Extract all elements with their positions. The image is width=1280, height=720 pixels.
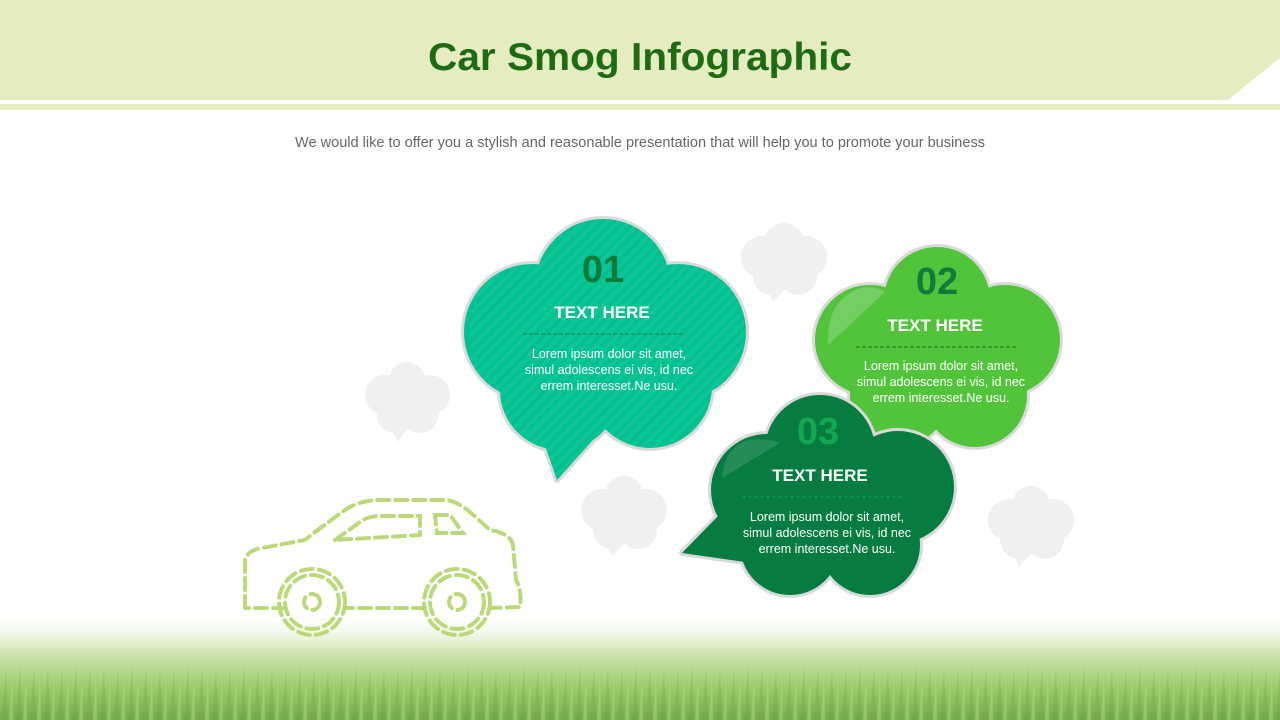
small cloud: top middle <box>741 223 827 302</box>
cloud 02 <box>815 247 1060 447</box>
number 03: 03 <box>797 411 839 453</box>
cloud 01 <box>464 219 746 480</box>
heading 03: TEXT HERE <box>772 466 868 485</box>
body 03: Lorem ipsum dolor sit amet, <box>750 510 904 524</box>
title: Car Smog Infographic <box>428 36 852 79</box>
body 02: errem interesset.Ne usu. <box>873 391 1009 405</box>
small cloud: bottom middle <box>581 476 667 556</box>
body 01: errem interesset.Ne usu. <box>541 379 677 393</box>
header band <box>0 0 1280 110</box>
car outline icon <box>245 500 520 635</box>
heading 01: TEXT HERE <box>554 303 650 322</box>
number 01: 01 <box>582 249 624 291</box>
small cloud: right <box>988 486 1074 567</box>
body 03: errem interesset.Ne usu. <box>759 542 895 556</box>
body 01: simul adolescens ei vis, id nec <box>525 363 693 377</box>
grass ground <box>0 612 1280 720</box>
body 01: Lorem ipsum dolor sit amet, <box>532 347 686 361</box>
small cloud: left <box>365 362 450 442</box>
cloud 03 <box>682 395 954 595</box>
subtitle: We would like to offer you a stylish and reasonable presentation that will help you to promote your business <box>295 135 985 151</box>
body 03: simul adolescens ei vis, id nec <box>743 526 911 540</box>
number 02: 02 <box>916 261 958 303</box>
heading 02: TEXT HERE <box>887 316 983 335</box>
body 02: Lorem ipsum dolor sit amet, <box>864 359 1018 373</box>
body 02: simul adolescens ei vis, id nec <box>857 375 1025 389</box>
